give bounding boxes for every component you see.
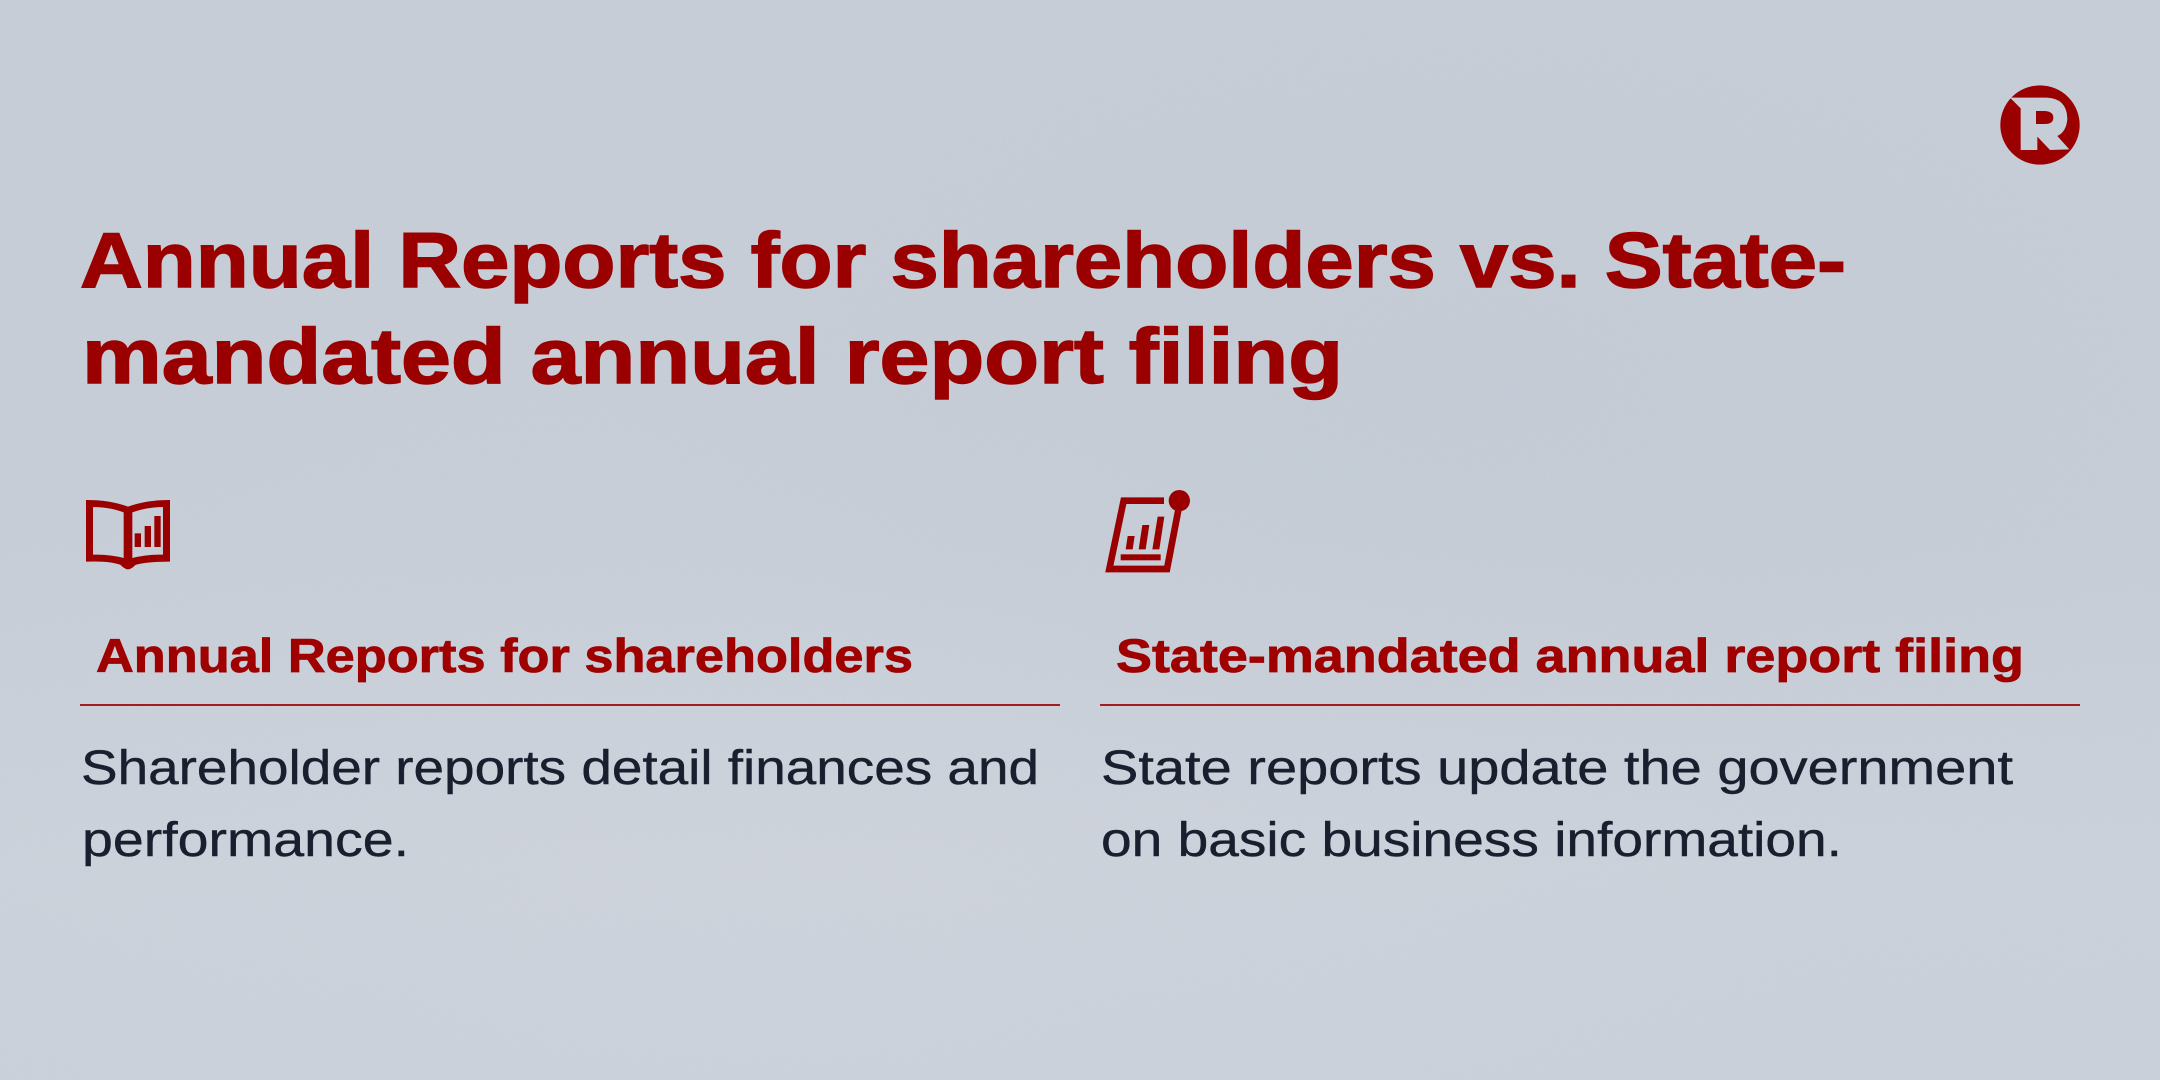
body text: shareholder reports bbox=[81, 742, 1039, 867]
heading: state-mandated annual report filing: State-mandated annual report filing bbox=[1116, 629, 2024, 682]
body text: state reports bbox=[1101, 742, 2013, 867]
body text: state reports: State reports update the government bbox=[1101, 742, 2013, 795]
title: mandated annual report filing bbox=[82, 312, 1343, 400]
body text: shareholder reports: performance. bbox=[82, 814, 409, 867]
title bbox=[80, 216, 1846, 400]
logo: R in circle bbox=[2000, 85, 2080, 165]
heading: annual reports for shareholders: Annual Reports for shareholders bbox=[96, 629, 913, 682]
body text: state reports: on basic business information. bbox=[1101, 814, 1842, 867]
title: Annual Reports for shareholders vs. State- bbox=[80, 216, 1846, 304]
panel: state-mandated annual report filing bbox=[1100, 490, 2080, 867]
panel: annual reports for shareholders bbox=[80, 501, 1060, 867]
icon: slanted report with bar chart and dot bbox=[1109, 490, 1190, 569]
body text: shareholder reports: Shareholder reports detail finances and bbox=[81, 742, 1039, 795]
icon: open book with bar chart bbox=[87, 501, 169, 568]
